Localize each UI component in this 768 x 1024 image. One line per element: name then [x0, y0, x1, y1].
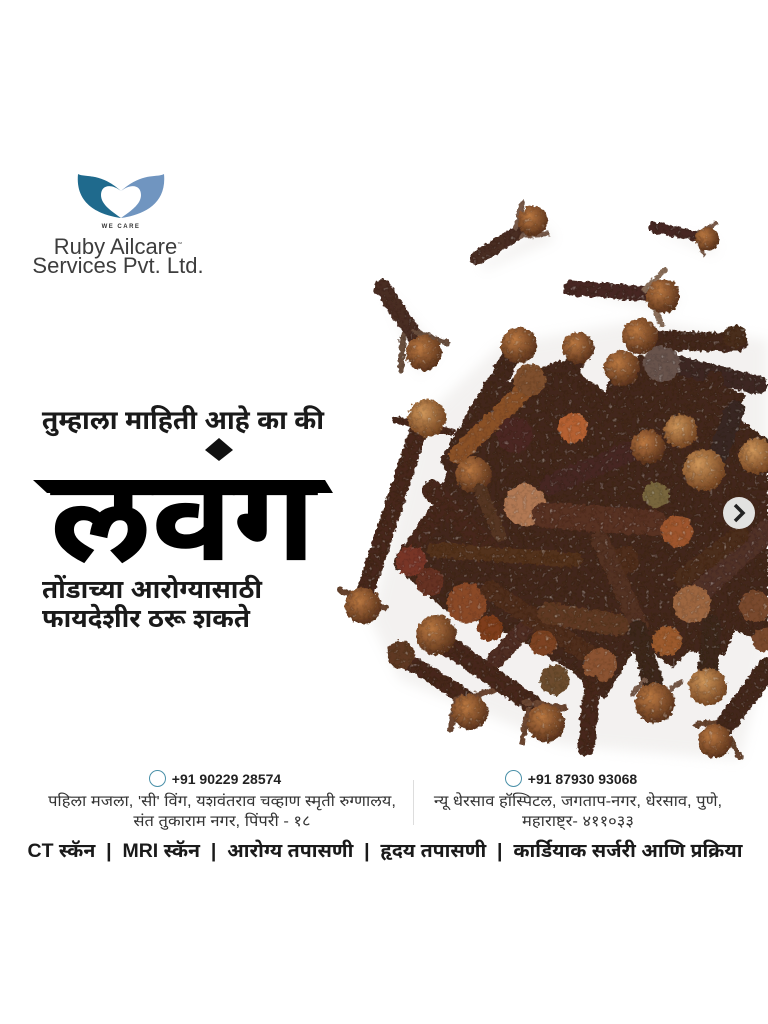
title headline bar	[33, 480, 333, 493]
carousel arrow button	[723, 497, 755, 529]
subtitle	[42, 574, 262, 633]
company name	[32, 234, 204, 278]
subtitle: तोंडाच्या आरोग्यासाठी	[42, 574, 262, 604]
logo tagline: WE CARE	[102, 224, 140, 230]
clove group	[340, 203, 768, 758]
address: Dhersal branch: न्यू धेरसाव हॉस्पिटल, जगताप-नगर, धेरसाव, पुणे,	[434, 793, 722, 810]
isolated clove: upper middle	[571, 270, 680, 325]
phone: Dhersal branch: +91 87930 93068	[528, 771, 637, 787]
pile cloves middle	[396, 484, 768, 641]
address: Pimpri branch: संत तुकाराम नगर, पिंपरी - १८	[133, 812, 311, 830]
isolated clove: top right	[654, 224, 719, 254]
heading line: do you know: तुम्हाला माहिती आहे का की	[42, 405, 324, 435]
clove: long left	[340, 399, 452, 624]
company name: Services Pvt. Ltd.	[32, 253, 204, 278]
address: Dhersal branch: महाराष्ट्र- ४११०३३	[522, 812, 634, 830]
isolated clove: left	[382, 287, 447, 371]
clove shadows	[370, 225, 768, 760]
address: Pimpri branch: पहिला मजला, 'सी' विंग, यशवंतराव चव्हाण स्मृती रुग्णालय,	[48, 793, 396, 810]
clove: bottom centre	[416, 615, 565, 742]
subtitle: फायदेशीर ठरू शकते	[42, 603, 250, 633]
icon: diamond ornament	[205, 438, 233, 461]
address: Pimpri branch	[48, 792, 396, 830]
pile cloves upper	[450, 318, 768, 508]
icon: hands forming heart	[78, 174, 164, 218]
isolated clove: top centre	[477, 203, 548, 258]
services strip: CT स्कॅन | MRI स्कॅन | आरोग्य तपासणी | हृदय तपासणी | कार्डियाक सर्जरी आणि प्रक्रिया	[28, 840, 742, 862]
logo: Ruby Ailcare	[32, 174, 204, 278]
phone: Pimpri branch: +91 90229 28574	[172, 771, 281, 787]
address: Dhersal branch	[434, 792, 722, 830]
main title: लवंग	[50, 446, 316, 588]
clove pile dark mass	[405, 355, 768, 700]
pile cloves lower	[490, 590, 768, 758]
clove: bottom left	[387, 641, 495, 730]
company name: Ruby Ailcare™	[54, 234, 182, 259]
